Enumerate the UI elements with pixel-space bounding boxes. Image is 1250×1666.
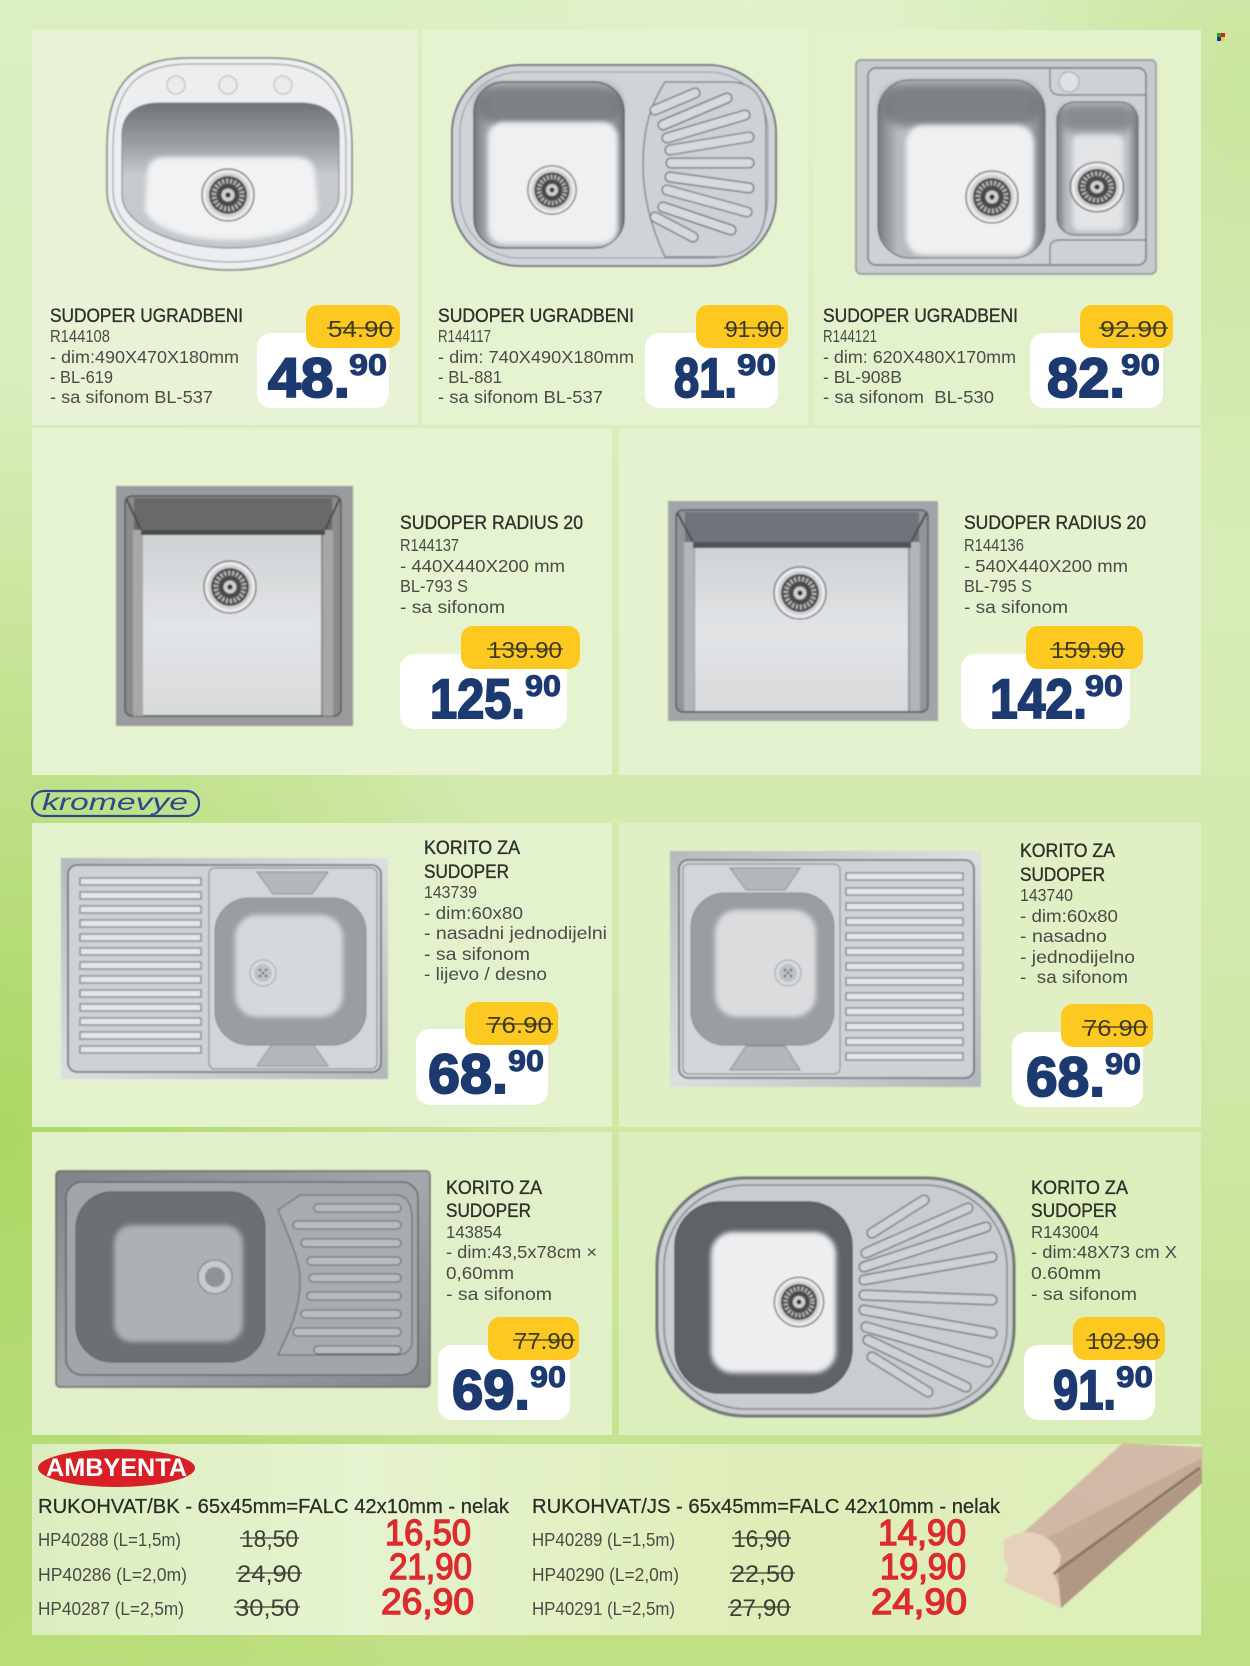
product details [823,326,1016,407]
panel: sudoper ugradbeni R144117 [422,30,808,425]
table: BK old prices [234,1526,302,1622]
product details [964,535,1128,617]
product details: - dim:60x80 [1020,906,1118,926]
table: JS new prices: 19,90 [880,1546,966,1587]
table: JS new prices: 14,90 [878,1512,966,1553]
sink image right drainboard [670,851,981,1087]
logo: kromevye: kromevye [42,789,188,815]
product details: - sa sifonom [964,597,1068,617]
panel: sudoper radius 20 R144136 [619,428,1201,775]
panel: korito za sudoper 143739 [32,823,612,1127]
price tag: 92.90 [1100,316,1167,342]
logo: ambyenta [38,1449,195,1487]
table: JS old prices [728,1526,795,1622]
price tag: 68. [1026,1045,1105,1108]
product title: KORITO ZA [1020,841,1115,862]
table: BK new prices [381,1512,474,1622]
product details: - 540X440X200 mm [964,556,1128,576]
product title: SUDOPER UGRADBENI [823,306,1018,327]
product title: SUDOPER [1020,865,1105,886]
price tag: 82. [1047,346,1125,409]
table: BK codes [38,1530,187,1619]
product details: 0.60mm [1031,1263,1101,1283]
table: JS new prices: 24,90 [871,1581,967,1622]
product details [446,1222,597,1304]
price tag: 159.90 [1051,637,1124,663]
panel: korito za sudoper 143854 [32,1132,612,1435]
product details: 143740 [1020,885,1073,905]
price tag: 90 [1116,1361,1153,1394]
product details: - sa sifonom [400,597,505,617]
product details: - lijevo / desno [424,964,547,984]
price tag: 91. [1053,1358,1116,1421]
price tag: 90 [737,349,776,382]
product title [446,1178,542,1222]
product details: 143854 [446,1222,502,1242]
price tag: 90 [530,1361,566,1394]
panel: ambyenta rukohvat [32,1443,1202,1635]
product title: SUDOPER [424,862,509,883]
price tag: 68. [428,1042,508,1105]
table: JS new prices [871,1512,967,1622]
product details: - BL-908B [823,367,902,387]
product details: - dim: 740X490X180mm [438,347,634,367]
price tag: 76.90 [487,1012,552,1038]
price tag [1024,1317,1165,1421]
product details: - sa sifonom [1031,1284,1137,1304]
heading: rukohvat BK: RUKOHVAT/BK - 65x45mm=FALC 42x10mm - nelak [38,1495,510,1518]
product details [400,535,565,617]
table: BK new prices: 21,90 [389,1546,472,1587]
table: JS codes: HP40289 (L=1,5m) [532,1530,675,1550]
product title: KORITO ZA [424,838,520,859]
product title: KORITO ZA [1031,1178,1128,1199]
table: BK old prices: 30,50 [235,1595,299,1622]
product details: - dim:48X73 cm X [1031,1242,1177,1262]
product details: - nasadni jednodijelni [424,923,607,943]
product title: SUDOPER UGRADBENI [438,306,634,327]
product details: - dim:490X470X180mm [50,347,239,367]
price tag: 69. [452,1358,530,1421]
product title [424,838,520,883]
table: JS codes: HP40291 (L=2,5m) [532,1599,675,1619]
sink image square [116,486,353,726]
table: JS codes: HP40290 (L=2,0m) [532,1565,679,1585]
product details: - 440X440X200 mm [400,556,565,576]
product details: R144121 [823,326,877,346]
table: JS old prices: 27,90 [729,1595,790,1622]
sink image dark steel [56,1171,430,1387]
brand color mark [1217,33,1225,41]
product details: - sa sifonom BL-530 [823,387,994,407]
sink image left drainboard [61,858,388,1079]
product details [438,326,634,407]
panel: korito za sudoper R143004 [619,1132,1201,1435]
table: BK old prices: 18,50 [241,1526,298,1553]
product details [1020,885,1135,987]
table: BK new prices: 26,90 [381,1581,474,1622]
product title [1020,841,1115,886]
product details: - nasadno [1020,926,1107,946]
price tag: 81. [674,346,737,409]
price tag: 90 [508,1045,544,1078]
sink image with drainboard [452,65,776,266]
price tag [416,1002,558,1105]
price tag: 90 [1105,1048,1141,1081]
product details: R144136 [964,535,1024,555]
table: JS old prices: 16,90 [733,1526,790,1553]
product details [50,326,239,407]
product details: R144137 [400,535,459,555]
price tag: 91.90 [725,316,782,342]
product details: BL-795 S [964,576,1032,596]
panel: sudoper ugradbeni R144121 [814,30,1201,425]
product details: - dim: 620X480X170mm [823,347,1016,367]
logo: kromevye [32,789,199,816]
product title: SUDOPER UGRADBENI [50,306,243,327]
product details: - dim:43,5x78cm × [446,1242,597,1262]
product details: - sa sifonom [424,944,530,964]
sink image wide square [668,501,938,721]
price tag: 139.90 [488,637,562,663]
panel: korito za sudoper 143740 [619,823,1201,1127]
price tag [1030,305,1173,409]
product details: - BL-619 [50,367,113,387]
sink image oval with fan drainboard [657,1178,1014,1416]
product details: - sa sifonom BL-537 [50,387,213,407]
product details [1031,1222,1177,1304]
price tag: 102.90 [1087,1328,1159,1354]
price tag: 142. [990,667,1087,730]
product details [424,882,607,984]
heading: rukohvat JS: RUKOHVAT/JS - 65x45mm=FALC 42x10mm - nelak [532,1495,1001,1518]
panel: sudoper radius 20 R144137 [32,428,612,775]
sink image round [107,58,352,270]
price tag: 90 [1121,349,1160,382]
product details: 143739 [424,882,477,902]
price tag [961,626,1143,730]
price tag [1012,1004,1153,1108]
product details: - sa sifonom [1020,967,1128,987]
product title: SUDOPER RADIUS 20 [964,513,1146,534]
panel: sudoper ugradbeni R144108 [32,30,418,425]
price tag: 90 [1085,670,1123,703]
price tag: 125. [430,667,525,730]
image: wooden handrail [1004,1443,1202,1608]
product details: - jednodijelno [1020,947,1135,967]
table: BK new prices: 16,50 [385,1512,471,1553]
product details: R144108 [50,326,110,346]
product details: - BL-881 [438,367,502,387]
product title: SUDOPER [446,1201,531,1222]
product details: R144117 [438,326,491,346]
table: BK codes: HP40286 (L=2,0m) [38,1565,187,1585]
product title [1031,1178,1128,1222]
price tag [257,305,400,409]
product details: - sa sifonom BL-537 [438,387,603,407]
price tag: 90 [349,349,387,382]
product details: 0,60mm [446,1263,514,1283]
product details: BL-793 S [400,576,468,596]
price tag [645,305,788,409]
product title: SUDOPER [1031,1201,1117,1222]
price tag: 76.90 [1083,1015,1147,1041]
table: JS codes [532,1530,679,1619]
price tag [400,626,580,730]
price tag: 77.90 [514,1328,574,1354]
price tag: 90 [525,670,561,703]
table: BK codes: HP40288 (L=1,5m) [38,1530,181,1550]
product title: KORITO ZA [446,1178,542,1199]
product details: - dim:60x80 [424,903,523,923]
table: BK old prices: 24,90 [237,1561,301,1588]
product title: SUDOPER RADIUS 20 [400,513,583,534]
price tag: 48. [268,346,350,409]
product details: R143004 [1031,1222,1099,1242]
product details: - sa sifonom [446,1284,552,1304]
sink image double bowl [856,60,1156,274]
price tag: 54.90 [328,316,393,342]
logo: ambyenta: AMBYENTA [46,1454,187,1482]
table: BK codes: HP40287 (L=2,5m) [38,1599,184,1619]
table: JS old prices: 22,50 [731,1561,794,1588]
price tag [438,1317,579,1421]
